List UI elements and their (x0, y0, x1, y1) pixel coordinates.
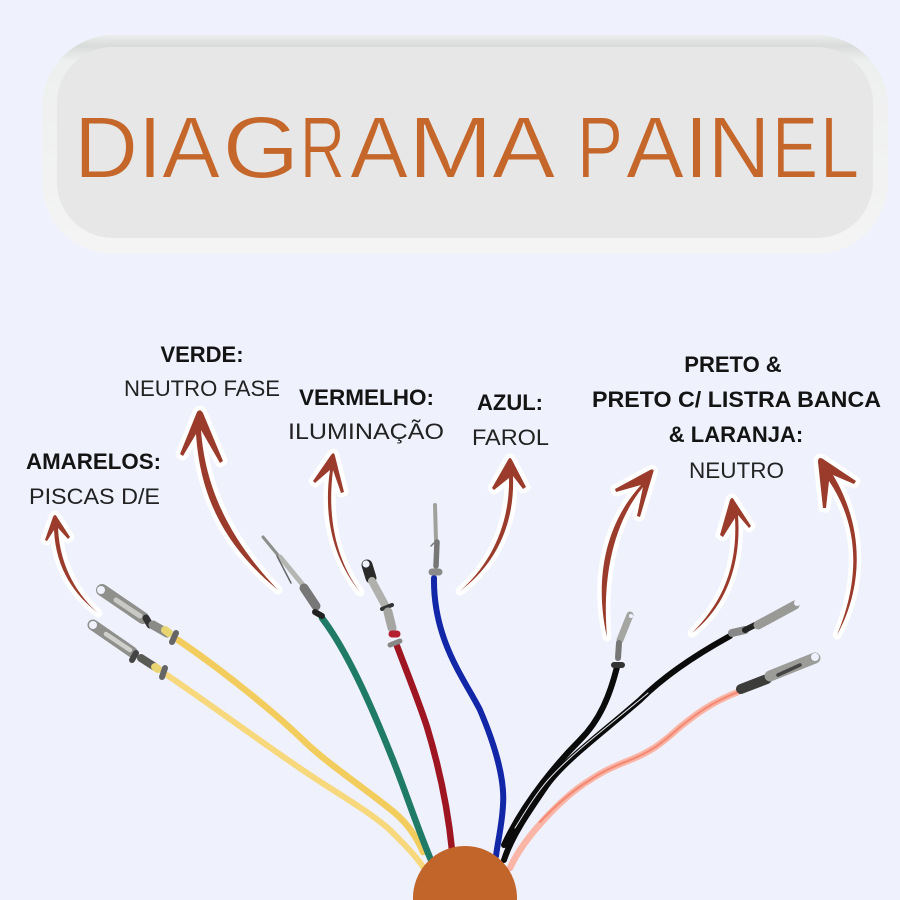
label: verde: VERDE: (160, 342, 244, 367)
connectors (89, 505, 819, 689)
wire: amarelo 1 (178, 640, 423, 852)
arrow: amarelos (45, 515, 98, 613)
title: R (300, 100, 345, 196)
label: azul (472, 390, 549, 450)
connector: azul (431, 505, 439, 572)
wires (167, 578, 738, 868)
label: vermelho: VERMELHO: (299, 385, 434, 410)
label: preto e laranja: PRETO C/ LISTRA BANCA (592, 387, 881, 412)
title: A (162, 100, 220, 196)
label: preto e laranja: & LARANJA: (669, 422, 803, 447)
label: azul: FAROL (472, 425, 549, 450)
arrow: vermelho (313, 453, 360, 592)
label: verde: NEUTRO FASE (124, 376, 280, 401)
title: A (492, 100, 555, 196)
label: vermelho: ILUMINAÇÃO (288, 419, 444, 444)
wire: preto (504, 667, 617, 845)
arrow: azul (460, 458, 526, 591)
connector: laranja (741, 653, 819, 689)
wire: laranja (510, 692, 738, 868)
title panel (42, 35, 888, 254)
connector: preto listra (732, 600, 800, 633)
title: I (684, 100, 708, 196)
wire stripe: preto listra (515, 693, 648, 828)
label: verde (124, 342, 280, 401)
connector: preto (614, 614, 633, 665)
label: amarelos: AMARELOS: (26, 449, 161, 474)
label: preto e laranja: NEUTRO (689, 458, 784, 483)
hub (413, 846, 517, 900)
wire: amarelo 2 (167, 675, 424, 868)
title: A (350, 100, 408, 196)
arrow: preto (602, 469, 654, 637)
title: A (626, 100, 684, 196)
wire: azul (434, 578, 503, 856)
arrow: preto listra (692, 498, 751, 633)
title: P (577, 100, 623, 196)
label: azul: AZUL: (477, 390, 543, 415)
title: G (222, 100, 300, 196)
title: I (138, 100, 162, 196)
label: preto e laranja: PRETO & (684, 352, 782, 377)
connector: amarelo 2 (89, 621, 165, 677)
connector: amarelo 1 (97, 586, 176, 642)
title: M (408, 100, 493, 196)
arrow: laranja (818, 458, 857, 635)
connector: verde (263, 537, 322, 616)
wire: verde (322, 618, 431, 860)
label: amarelos: PISCAS D/E (29, 484, 160, 509)
arrow: verde (180, 410, 278, 590)
wire core: laranja (540, 692, 738, 822)
label: vermelho (288, 385, 444, 444)
wire: vermelho (397, 646, 452, 850)
connector: vermelho (362, 560, 400, 645)
title: E (772, 100, 818, 196)
label: amarelos (26, 449, 161, 509)
wire: preto listra (504, 636, 730, 860)
title: N (708, 100, 770, 196)
title: D (74, 100, 138, 196)
title: L (820, 100, 859, 196)
label: preto e laranja (592, 352, 881, 483)
